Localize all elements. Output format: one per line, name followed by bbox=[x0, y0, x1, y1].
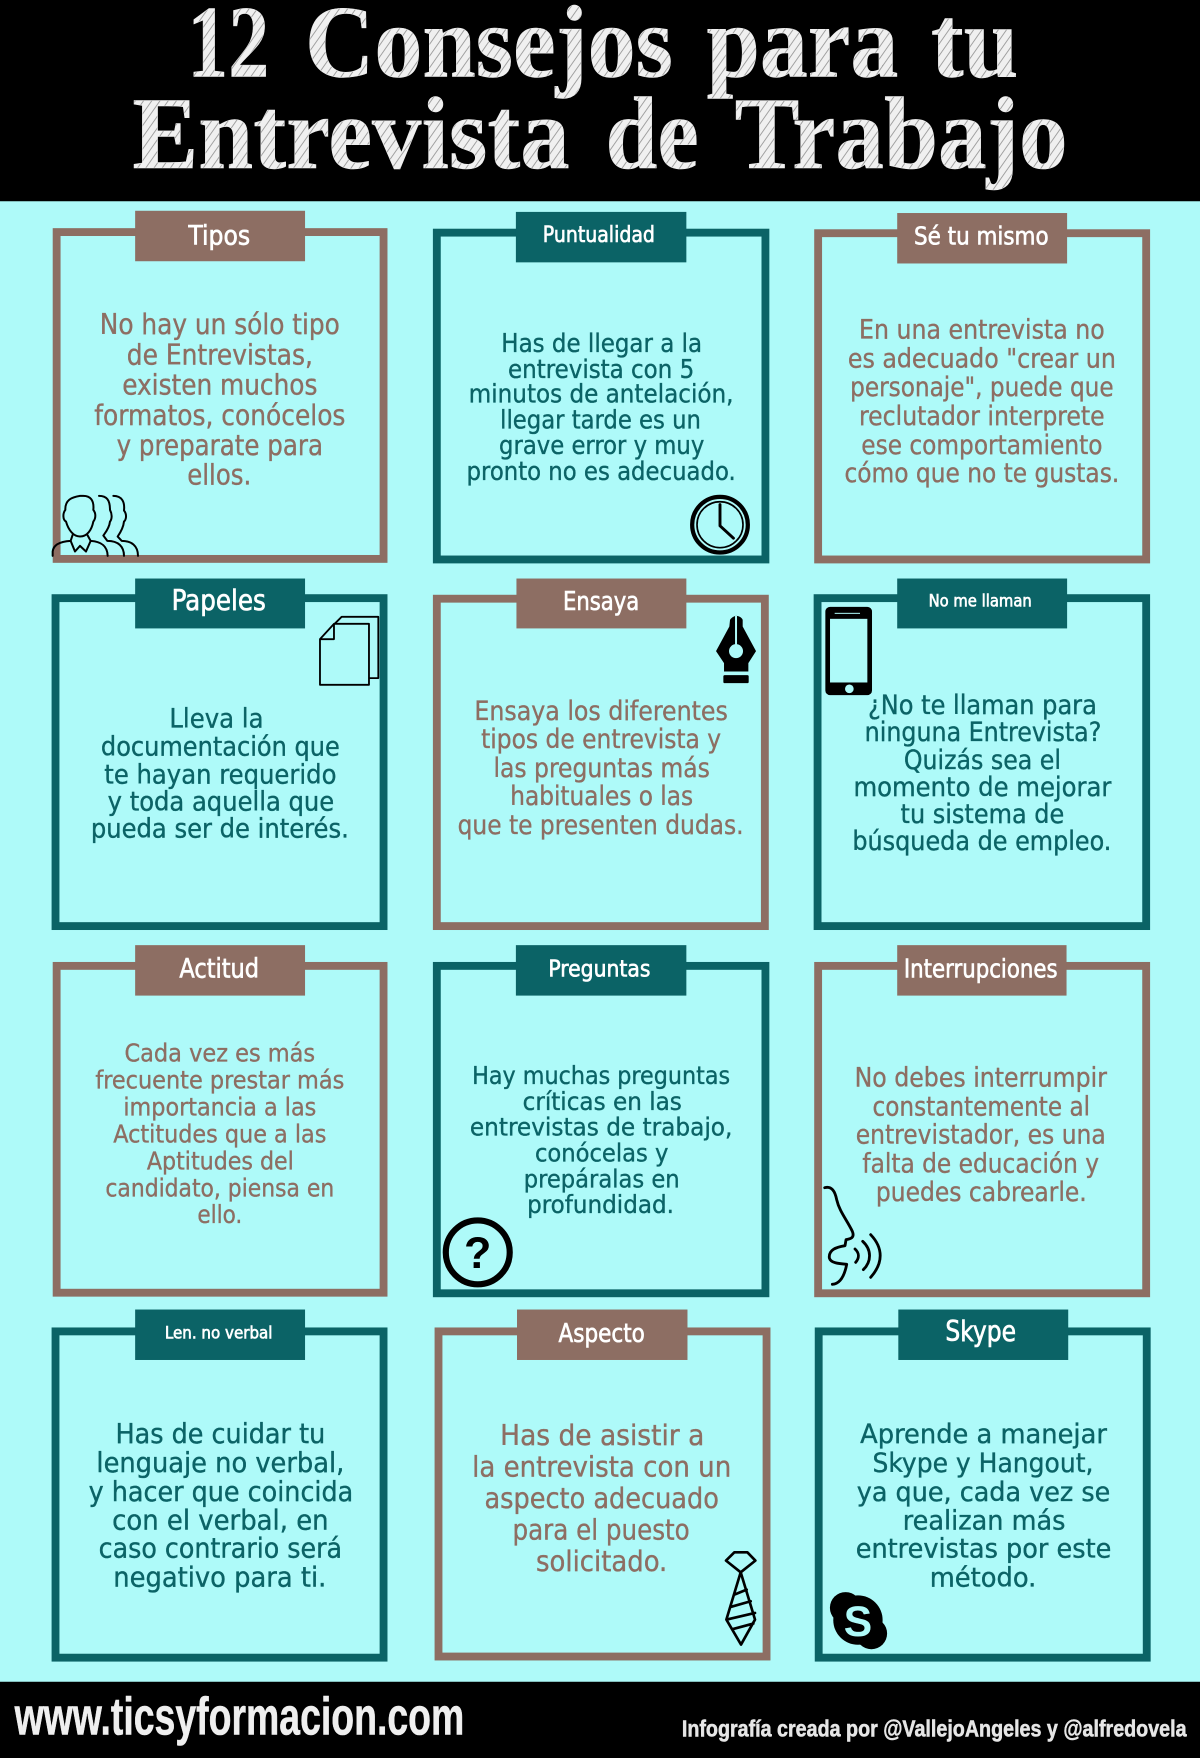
text: Skype: Skype y Hangout, bbox=[873, 1448, 1093, 1479]
panel: Aspecto bbox=[439, 1310, 767, 1657]
text: Ensaya: tipos de entrevista y bbox=[481, 724, 721, 755]
text: Papeles: y toda aquella que bbox=[108, 787, 334, 818]
text: Aspecto: aspecto adecuado bbox=[484, 1482, 719, 1515]
icon: speaking profile bbox=[825, 1187, 880, 1284]
text: Preguntas: entrevistas de trabajo, bbox=[470, 1113, 732, 1142]
text: Actitud: Actitudes que a las bbox=[113, 1119, 326, 1148]
text: Papeles: documentación que bbox=[101, 732, 340, 763]
text: Puntualidad: llegar tarde es un bbox=[500, 405, 701, 435]
text: Ensaya: las preguntas más bbox=[493, 753, 710, 784]
icon: clock bbox=[692, 497, 748, 553]
panel: Puntualidad bbox=[437, 212, 765, 559]
text: Interrupciones bbox=[855, 1062, 1107, 1208]
text: Papeles: te hayan requerido bbox=[104, 760, 336, 791]
icon: question mark: ? bbox=[464, 1227, 491, 1278]
text: Sé tu mismo bbox=[844, 315, 1119, 489]
panel: Sé tu mismo bbox=[818, 213, 1146, 559]
text: Sé tu mismo: es adecuado "crear un bbox=[848, 344, 1116, 375]
text: Tipos: y preparate para bbox=[117, 429, 323, 462]
panel: Interrupciones bbox=[818, 945, 1146, 1293]
icon: documents bbox=[320, 617, 378, 685]
icon: smartphone bbox=[825, 607, 872, 695]
footer band bbox=[0, 1682, 1200, 1758]
text: No me llaman: momento de mejorar bbox=[853, 773, 1112, 803]
title banner: Entrevista bbox=[132, 77, 570, 191]
text: Aspecto bbox=[472, 1419, 731, 1578]
icon: skype logo: S bbox=[844, 1598, 872, 1646]
text: Preguntas: críticas en las bbox=[523, 1087, 682, 1116]
text: Skype bbox=[856, 1419, 1111, 1593]
text: Puntualidad: pronto no es adecuado. bbox=[467, 457, 736, 487]
text: Actitud: frecuente prestar más bbox=[95, 1066, 344, 1095]
text: Len. no verbal bbox=[89, 1419, 353, 1593]
panel: Len. no verbal bbox=[56, 1310, 384, 1658]
panel: Ensaya bbox=[437, 579, 765, 926]
text: Skype: realizan más bbox=[903, 1505, 1065, 1536]
panel: No me llaman: No me llaman bbox=[929, 591, 1032, 611]
panel: Tipos bbox=[53, 211, 384, 559]
text: Skype: método. bbox=[930, 1562, 1036, 1593]
text: Sé tu mismo: ese comportamiento bbox=[861, 430, 1102, 461]
text: Papeles bbox=[91, 704, 349, 845]
panel: Actitud: Actitud bbox=[179, 954, 259, 985]
panel: Papeles bbox=[56, 579, 384, 926]
text: Actitud: importancia a las bbox=[123, 1093, 316, 1122]
text: Aspecto: para el puesto bbox=[513, 1513, 690, 1546]
text: Ensaya: habituales o las bbox=[510, 781, 693, 812]
text: Tipos: ellos. bbox=[187, 458, 251, 491]
text: Actitud: ello. bbox=[197, 1200, 242, 1229]
text: No me llaman: tu sistema de bbox=[901, 800, 1064, 830]
footer website: www.ticsyformacion.com bbox=[14, 1687, 464, 1746]
text: Interrupciones: No debes interrumpir bbox=[855, 1062, 1107, 1093]
text: Tipos: de Entrevistas, bbox=[127, 338, 313, 371]
panel: Actitud bbox=[57, 945, 384, 1293]
text: Len. no verbal: caso contrario será bbox=[99, 1533, 342, 1564]
icon: question mark bbox=[446, 1220, 510, 1284]
panel: Tipos: Tipos bbox=[187, 220, 250, 251]
text: Aspecto: Has de asistir a bbox=[500, 1419, 704, 1452]
panel: Preguntas bbox=[437, 945, 765, 1293]
text: Aspecto: la entrevista con un bbox=[472, 1451, 731, 1484]
text: No me llaman: búsqueda de empleo. bbox=[852, 827, 1111, 857]
panel: Aspecto: Aspecto bbox=[559, 1319, 645, 1349]
text: Len. no verbal: con el verbal, en bbox=[112, 1505, 329, 1536]
text: No me llaman: ninguna Entrevista? bbox=[865, 718, 1101, 748]
text: Papeles: Lleva la bbox=[169, 704, 264, 735]
text: Skype: entrevistas por este bbox=[856, 1533, 1111, 1564]
text: Ensaya: Ensaya los diferentes bbox=[474, 696, 728, 727]
text: Tipos bbox=[94, 308, 345, 491]
text: Puntualidad bbox=[467, 329, 736, 487]
title banner: de bbox=[606, 77, 699, 191]
text: Skype: ya que, cada vez se bbox=[857, 1477, 1110, 1508]
text: Len. no verbal: Has de cuidar tu bbox=[116, 1419, 325, 1450]
text: Interrupciones: entrevistador, es una bbox=[856, 1120, 1106, 1151]
text: Papeles: pueda ser de interés. bbox=[91, 814, 349, 845]
text: Preguntas: Hay muchas preguntas bbox=[472, 1061, 730, 1090]
text: Puntualidad: minutos de antelación, bbox=[469, 380, 733, 410]
panel: Papeles: Papeles bbox=[172, 584, 266, 617]
panel: Skype bbox=[819, 1310, 1147, 1658]
panel: Preguntas: Preguntas bbox=[548, 955, 650, 983]
icon: pen nib bbox=[716, 616, 756, 683]
text: Ensaya: que te presenten dudas. bbox=[458, 810, 744, 841]
panel: Skype: Skype bbox=[945, 1315, 1016, 1348]
panel: Ensaya: Ensaya bbox=[563, 587, 639, 617]
panel: Interrupciones: Interrupciones bbox=[904, 955, 1058, 985]
text: Ensaya bbox=[458, 696, 744, 841]
text: Actitud bbox=[95, 1039, 344, 1229]
text: Preguntas: conócelas y bbox=[535, 1139, 668, 1168]
text: Interrupciones: falta de educación y bbox=[862, 1149, 1099, 1180]
text: Actitud: Cada vez es más bbox=[124, 1039, 315, 1068]
text: Puntualidad: grave error y muy bbox=[499, 431, 705, 461]
text: Sé tu mismo: cómo que no te gustas. bbox=[844, 458, 1119, 489]
text: Preguntas: prepáralas en bbox=[524, 1164, 680, 1193]
text: No me llaman: Quizás sea el bbox=[904, 746, 1061, 776]
text: Sé tu mismo: reclutador interprete bbox=[859, 401, 1105, 432]
text: Len. no verbal: y hacer que coincida bbox=[89, 1477, 353, 1508]
icon: skype logo bbox=[830, 1592, 887, 1649]
text: Tipos: No hay un sólo tipo bbox=[100, 308, 340, 341]
text: Len. no verbal: negativo para ti. bbox=[113, 1562, 326, 1593]
icon: necktie bbox=[726, 1552, 755, 1645]
panel: Sé tu mismo: Sé tu mismo bbox=[914, 221, 1049, 250]
text: Preguntas bbox=[470, 1061, 732, 1219]
panel: Len. no verbal: Len. no verbal bbox=[165, 1323, 273, 1343]
text: Actitud: candidato, piensa en bbox=[105, 1173, 334, 1202]
text: Interrupciones: constantemente al bbox=[873, 1092, 1090, 1123]
text: No me llaman bbox=[852, 691, 1112, 857]
text: Tipos: existen muchos bbox=[122, 369, 317, 402]
text: Sé tu mismo: personaje", puede que bbox=[850, 372, 1114, 403]
title banner: Trabajo bbox=[735, 77, 1068, 191]
text: Interrupciones: puedes cabrearle. bbox=[876, 1177, 1087, 1208]
text: Aspecto: solicitado. bbox=[536, 1545, 667, 1578]
text: Actitud: Aptitudes del bbox=[147, 1146, 294, 1175]
icon: people bbox=[53, 496, 138, 556]
text: Puntualidad: entrevista con 5 bbox=[508, 355, 694, 385]
text: Tipos: formatos, conócelos bbox=[94, 399, 345, 432]
text: No me llaman: ¿No te llaman para bbox=[868, 691, 1097, 721]
panel: Puntualidad: Puntualidad bbox=[543, 222, 655, 248]
text: Puntualidad: Has de llegar a la bbox=[501, 329, 702, 359]
panel: No me llaman bbox=[818, 579, 1146, 926]
text: Sé tu mismo: En una entrevista no bbox=[859, 315, 1105, 346]
text: Skype: Aprende a manejar bbox=[860, 1419, 1107, 1450]
text: Len. no verbal: lenguaje no verbal, bbox=[96, 1448, 344, 1479]
text: Preguntas: profundidad. bbox=[527, 1190, 674, 1219]
title banner bbox=[0, 0, 1200, 201]
